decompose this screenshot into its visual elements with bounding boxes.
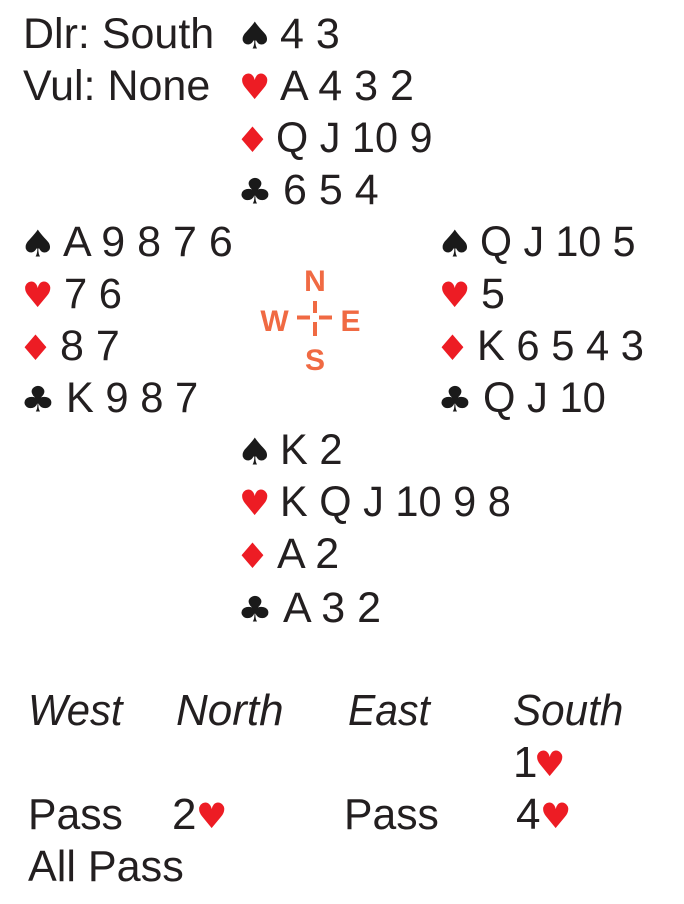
east spades: Q J 10 5 [480, 218, 636, 266]
compass [260, 266, 361, 374]
bid 4 hearts [516, 790, 571, 839]
west hearts: 7 6 [64, 270, 122, 318]
compass cross [297, 301, 332, 336]
west hearts [22, 270, 122, 318]
south spades: K 2 [280, 426, 343, 474]
south diamonds: A 2 [277, 530, 339, 578]
west spades: A 9 8 7 6 [63, 218, 233, 266]
deal info: dealer: Dlr: South [23, 10, 214, 58]
heading South: South [513, 686, 623, 735]
west diamonds: ♦ [18, 328, 53, 369]
east diamonds: K 6 5 4 3 [477, 322, 644, 370]
south hand [235, 426, 511, 632]
north spades: ♠ [236, 14, 274, 57]
north clubs: 6 5 4 [283, 166, 379, 214]
heading West: West [28, 686, 122, 735]
compass W: W [260, 305, 289, 338]
south clubs: ♣ [237, 590, 273, 630]
heading East: East [348, 686, 430, 735]
west clubs: K 9 8 7 [66, 374, 198, 422]
west hearts: ♥ [22, 276, 53, 316]
bid pass east: Pass [344, 790, 439, 839]
heading North: North [176, 686, 284, 735]
west spades: ♠ [19, 222, 57, 265]
north spades: 4 3 [280, 10, 340, 58]
east hand [435, 218, 644, 422]
north hearts: A 4 3 2 [280, 62, 414, 110]
bid 2 hearts: ♥ [196, 797, 227, 837]
west hand [18, 218, 233, 422]
west diamonds: 8 7 [60, 322, 120, 370]
north spades [236, 10, 340, 58]
bid 1 heart [513, 738, 565, 787]
south clubs: A 3 2 [283, 584, 381, 632]
bid 2 hearts [172, 790, 227, 839]
bid 1 heart: ♥ [534, 745, 565, 785]
east spades: ♠ [436, 222, 474, 265]
south diamonds [235, 530, 339, 578]
bid pass west: Pass [28, 790, 123, 839]
bidding table [28, 686, 623, 891]
south diamonds: ♦ [235, 536, 270, 577]
south hearts: K Q J 10 9 8 [280, 478, 511, 526]
south spades [236, 426, 343, 474]
bid all pass: All Pass [28, 842, 184, 891]
north hand [235, 10, 433, 214]
west clubs: ♣ [20, 380, 56, 420]
east clubs: ♣ [437, 380, 473, 420]
south spades: ♠ [236, 430, 274, 473]
deal info: vulnerability: Vul: None [23, 62, 210, 110]
north diamonds: ♦ [235, 120, 270, 161]
bid 4 hearts: ♥ [540, 797, 571, 837]
east diamonds: ♦ [435, 328, 470, 369]
west diamonds [18, 322, 120, 370]
south hearts: ♥ [239, 484, 270, 524]
north clubs [237, 166, 379, 214]
north clubs: ♣ [237, 172, 273, 212]
bid 2 hearts: 2 [172, 790, 196, 839]
south clubs [237, 584, 381, 632]
east clubs: Q J 10 [483, 374, 606, 422]
north diamonds: Q J 10 9 [276, 114, 433, 162]
bid 4 hearts: 4 [516, 790, 540, 839]
north hearts: ♥ [239, 68, 270, 108]
east hearts [439, 270, 505, 318]
east hearts: 5 [481, 270, 505, 318]
bid 1 heart: 1 [513, 738, 537, 787]
compass E: E [340, 305, 361, 338]
east hearts: ♥ [439, 276, 470, 316]
